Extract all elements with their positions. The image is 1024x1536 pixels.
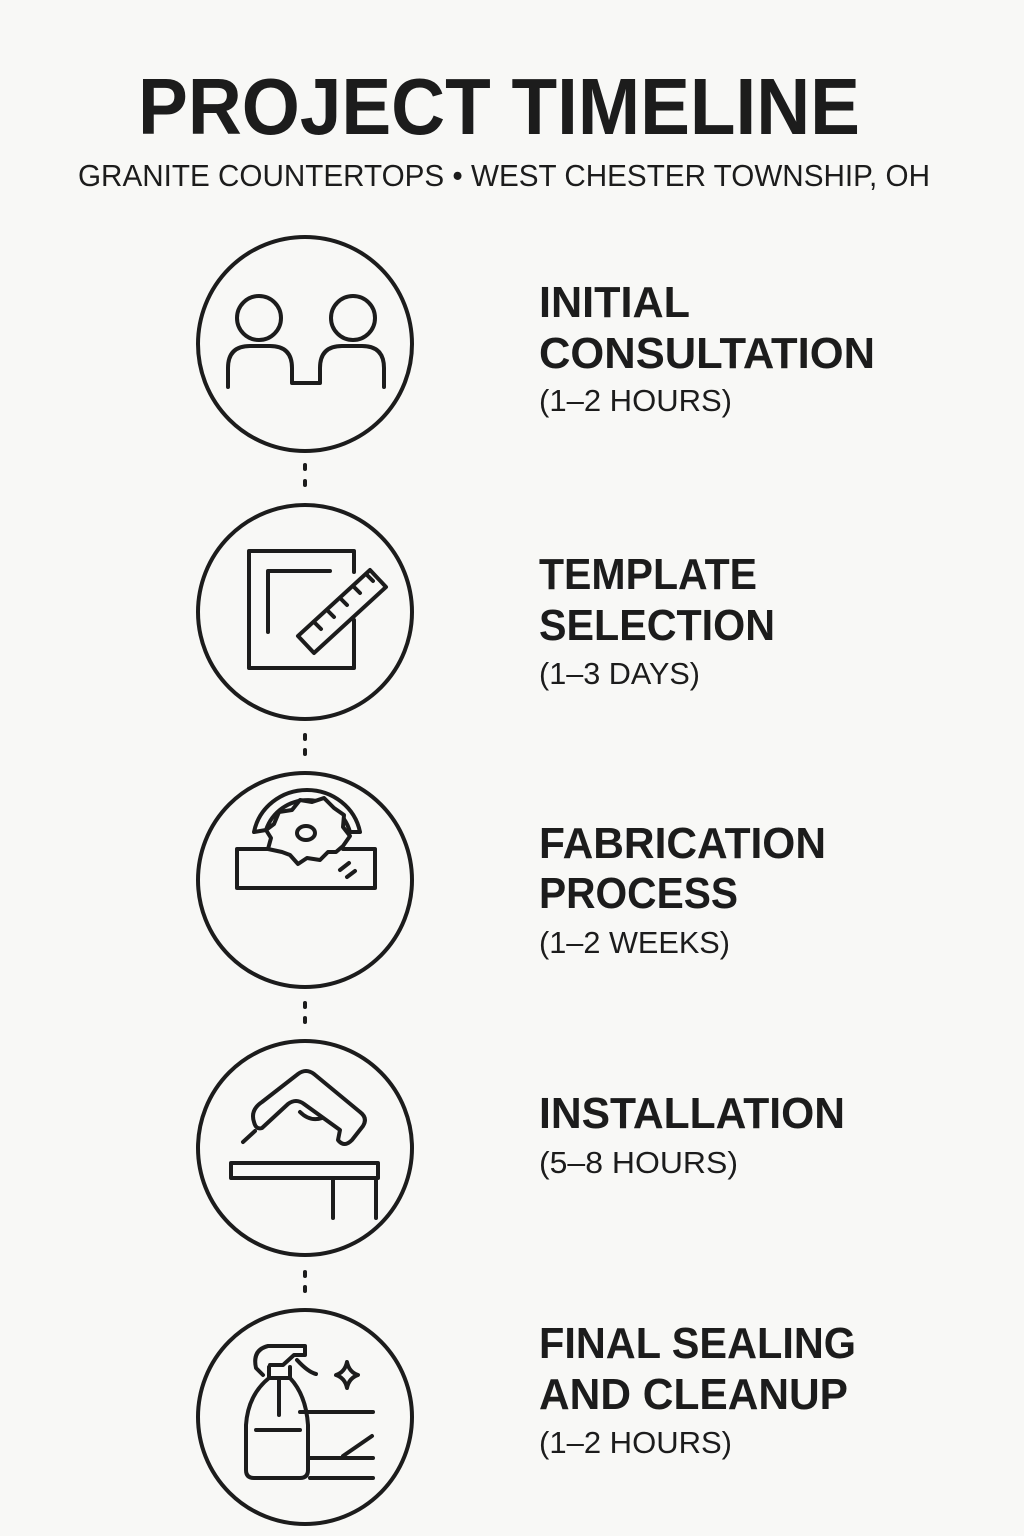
icon: consultation [198,237,412,451]
step 5 text: (1–2 HOURS) [539,1425,732,1460]
step 4 text [539,1089,845,1180]
icon: fabrication saw [198,773,412,987]
step 2 text [539,550,775,691]
step 4 text: INSTALLATION [539,1089,845,1138]
connector dots [303,463,307,1293]
step 3 text: PROCESS [539,869,738,918]
step 5 text [539,1319,856,1460]
step 3 text: FABRICATION [539,819,826,868]
icon: template [198,505,412,719]
step 1 text [539,278,875,418]
step 3 text: (1–2 WEEKS) [539,925,730,960]
title: PROJECT TIMELINE [138,62,860,151]
step 2 text: TEMPLATE [539,550,757,599]
step 5 text: AND CLEANUP [539,1370,848,1419]
step 1 text: INITIAL [539,278,690,327]
step 3 text [539,819,826,960]
step 2 text: (1–3 DAYS) [539,656,700,691]
subtitle: GRANITE COUNTERTOPS • WEST CHESTER TOWNSHIP, OH [78,158,930,193]
step 4 text: (5–8 HOURS) [539,1145,738,1180]
step 5 text: FINAL SEALING [539,1319,856,1368]
step 1 text: CONSULTATION [539,329,875,378]
step 1 text: (1–2 HOURS) [539,383,732,418]
icon: installation drill [198,1041,412,1255]
icon: sealing and cleanup [198,1310,412,1524]
step 2 text: SELECTION [539,601,775,650]
